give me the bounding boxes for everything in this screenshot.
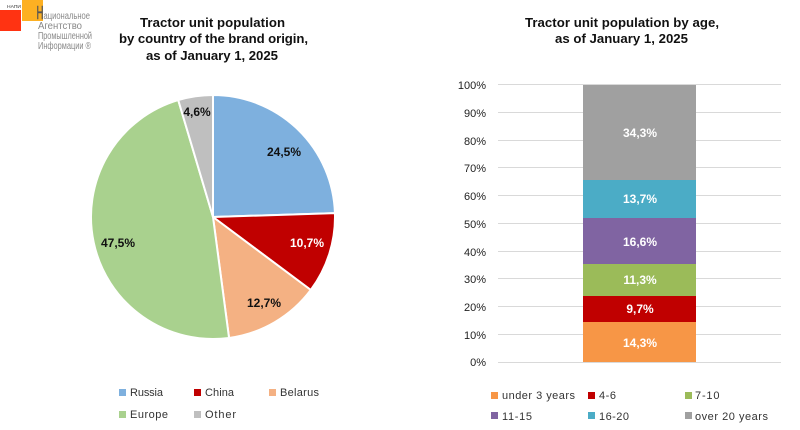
legend: bar chart: 4-6 — [599, 390, 616, 402]
legend: pie chart: Other — [205, 409, 236, 421]
y axis labels: 80% — [464, 136, 486, 148]
y axis labels: 30% — [464, 274, 486, 286]
title: pie chart: Tractor unit population — [140, 15, 285, 30]
bar value labels: 34,3% — [623, 126, 657, 140]
logo: NAPI: Н — [36, 3, 44, 23]
pie chart: by country — [91, 95, 335, 339]
bar segments — [583, 85, 696, 362]
y axis labels — [458, 80, 486, 369]
title: stacked bar chart: as of January 1, 2025 — [555, 31, 688, 46]
bar value labels — [623, 126, 657, 350]
y axis labels: 100% — [458, 80, 486, 92]
pie value labels: 10,7% — [290, 236, 324, 250]
y axis labels: 10% — [464, 330, 486, 342]
logo: NAPI: Информации ® — [38, 40, 91, 52]
legend: bar chart: over 20 years — [695, 411, 768, 423]
bar value labels: 16,6% — [623, 235, 657, 249]
bar value labels: 14,3% — [623, 336, 657, 350]
y axis labels: 60% — [464, 191, 486, 203]
legend: bar chart: 16-20 — [599, 411, 629, 423]
pie value labels: 24,5% — [267, 145, 301, 159]
y axis labels: 90% — [464, 108, 486, 120]
stacked bar chart: by age — [458, 80, 781, 369]
title: pie chart: as of January 1, 2025 — [146, 48, 278, 63]
title: stacked bar chart: Tractor unit population by age, — [525, 15, 719, 30]
title: stacked bar chart — [525, 15, 719, 46]
bar value labels: 13,7% — [623, 192, 657, 206]
logo: NAPI: ациональное — [44, 11, 90, 22]
legend: pie chart: Europe — [130, 409, 168, 421]
title: pie chart: by country of the brand origin, — [119, 31, 308, 46]
y axis labels: 40% — [464, 247, 486, 259]
logo: NAPI: Агентство — [38, 21, 82, 32]
bar value labels: 11,3% — [623, 273, 657, 287]
y axis labels: 50% — [464, 219, 486, 231]
logo: NAPI: Промышленной — [38, 31, 92, 42]
legend: pie chart — [119, 387, 320, 421]
bar value labels: 9,7% — [626, 302, 654, 316]
y axis labels: 70% — [464, 163, 486, 175]
logo: NAPI — [0, 0, 92, 52]
legend: bar chart — [491, 390, 768, 423]
legend: bar chart: 7-10 — [695, 390, 720, 402]
pie value labels: 12,7% — [247, 296, 281, 310]
pie value labels: 47,5% — [101, 236, 135, 250]
title: pie chart — [119, 15, 308, 63]
pie value labels — [101, 105, 324, 310]
legend: pie chart: China — [205, 387, 235, 399]
logo: NAPI: НАПИ — [7, 4, 21, 9]
legend: pie chart: Belarus — [280, 387, 320, 399]
legend: bar chart: under 3 years — [502, 390, 576, 402]
legend: bar chart: 11-15 — [502, 411, 532, 423]
legend: pie chart: Russia — [130, 387, 164, 399]
y axis labels: 0% — [470, 357, 486, 369]
y axis labels: 20% — [464, 302, 486, 314]
pie value labels: 4,6% — [183, 105, 211, 119]
